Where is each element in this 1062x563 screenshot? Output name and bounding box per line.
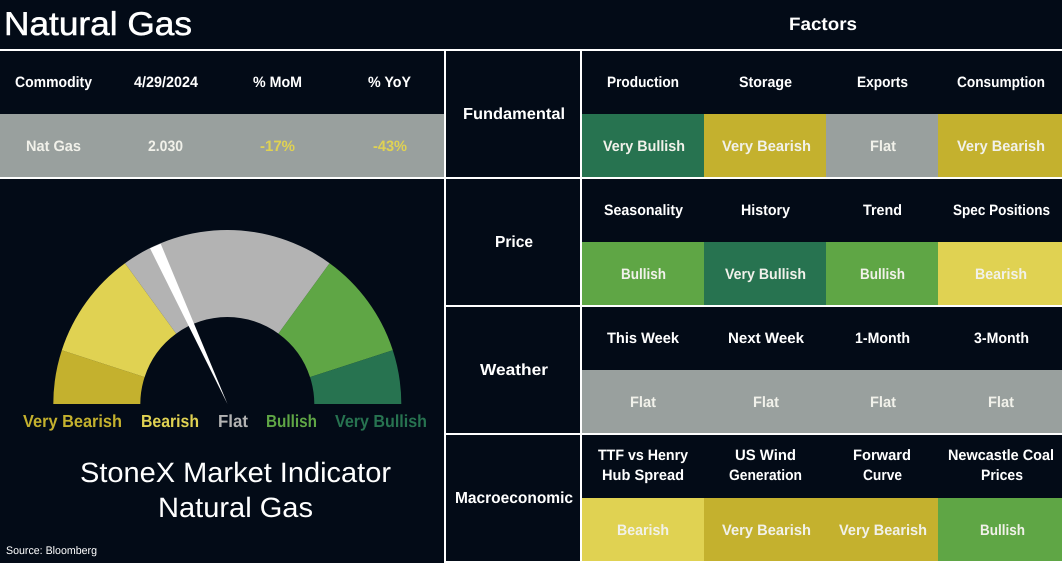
panel: fundamental row: Very Bearish	[957, 138, 1045, 155]
panel: fundamental row: Exports	[857, 74, 908, 91]
panel: commodity table: 4/29/2024	[134, 74, 199, 91]
panel: commodity table: 2.030	[148, 138, 183, 155]
panel: weather row: This Week	[607, 330, 680, 347]
panel: weather row: Next Week	[728, 330, 805, 347]
panel: macroeconomic row	[455, 447, 1062, 563]
panel: fundamental row: Production	[607, 74, 679, 91]
panel: price row: History	[741, 202, 791, 219]
panel: weather row: 3-Month	[974, 330, 1029, 347]
panel: macroeconomic row: Very Bearish	[839, 522, 927, 539]
panel: weather row: Flat	[630, 394, 656, 411]
factors heading: Factors	[789, 14, 857, 34]
gauge needle	[150, 244, 228, 404]
panel: macroeconomic row: Macroeconomic	[455, 490, 573, 507]
gauge segment: flat	[125, 230, 330, 334]
panel: price row: Bearish	[975, 266, 1027, 283]
panel: commodity table: -43%	[373, 138, 407, 155]
panel: macroeconomic row: Generation	[729, 467, 802, 484]
gauge legend: Very Bullish	[335, 411, 427, 431]
gauge segment: bullish	[278, 263, 393, 377]
panel: fundamental row	[463, 74, 1062, 177]
panel: fundamental row: Flat	[870, 138, 896, 155]
gauge legend: Very Bearish	[23, 411, 122, 431]
panel: macroeconomic row: Very Bearish	[722, 522, 811, 539]
gauge legend: Flat	[218, 411, 248, 431]
gauge segment: very bullish	[310, 350, 401, 404]
gauge caption: StoneX Market Indicator	[80, 457, 391, 488]
panel: weather row: Flat	[753, 394, 779, 411]
panel: price row	[495, 202, 1062, 305]
panel: fundamental row: Very Bullish	[603, 138, 685, 155]
panel: macroeconomic row: Newcastle Coal	[948, 447, 1054, 464]
panel: macroeconomic row: US Wind	[735, 447, 796, 464]
panel: macroeconomic row: Hub Spread	[602, 467, 684, 484]
panel: price row: Bullish	[860, 266, 905, 283]
title: Natural Gas	[4, 5, 192, 42]
panel: price row: Trend	[863, 202, 902, 219]
panel: price row: Price	[495, 234, 533, 251]
panel: commodity table: Commodity	[15, 74, 93, 91]
panel: fundamental row: Fundamental	[463, 106, 565, 123]
panel: weather row	[480, 330, 1062, 433]
panel: price row: Seasonality	[604, 202, 684, 219]
panel: commodity table	[0, 74, 444, 177]
gauge caption: Natural Gas	[158, 492, 313, 523]
panel: fundamental row: Very Bearish	[722, 138, 811, 155]
gauge chart	[53, 230, 401, 404]
panel: commodity table: % YoY	[368, 74, 411, 91]
panel: weather row: Weather	[480, 362, 548, 379]
source note: Source: Bloomberg	[6, 545, 97, 557]
panel: fundamental row: Consumption	[957, 74, 1045, 91]
gauge caption	[80, 457, 391, 523]
panel: macroeconomic row: Bullish	[980, 522, 1025, 539]
panel: fundamental row: Storage	[739, 74, 792, 91]
panel: weather row: Flat	[988, 394, 1014, 411]
panel: macroeconomic row: Bearish	[617, 522, 669, 539]
gauge segment: very bearish	[53, 350, 145, 404]
gauge legend: Bearish	[141, 411, 199, 431]
panel: macroeconomic row: TTF vs Henry	[598, 447, 689, 464]
gauge legend	[23, 411, 427, 431]
panel: price row: Spec Positions	[953, 202, 1050, 219]
panel: commodity table: % MoM	[253, 74, 302, 91]
gauge legend: Bullish	[266, 411, 317, 431]
panel: weather row: Flat	[870, 394, 896, 411]
gauge segment: bearish	[62, 263, 176, 377]
panel: weather row: 1-Month	[855, 330, 910, 347]
panel: commodity table: -17%	[260, 138, 295, 155]
panel: macroeconomic row: Prices	[981, 467, 1023, 484]
panel: price row: Bullish	[621, 266, 666, 283]
panel: macroeconomic row: Curve	[863, 467, 902, 484]
panel: price row: Very Bullish	[725, 266, 806, 283]
panel: macroeconomic row: Forward	[853, 447, 911, 464]
panel: commodity table: Nat Gas	[26, 138, 81, 155]
